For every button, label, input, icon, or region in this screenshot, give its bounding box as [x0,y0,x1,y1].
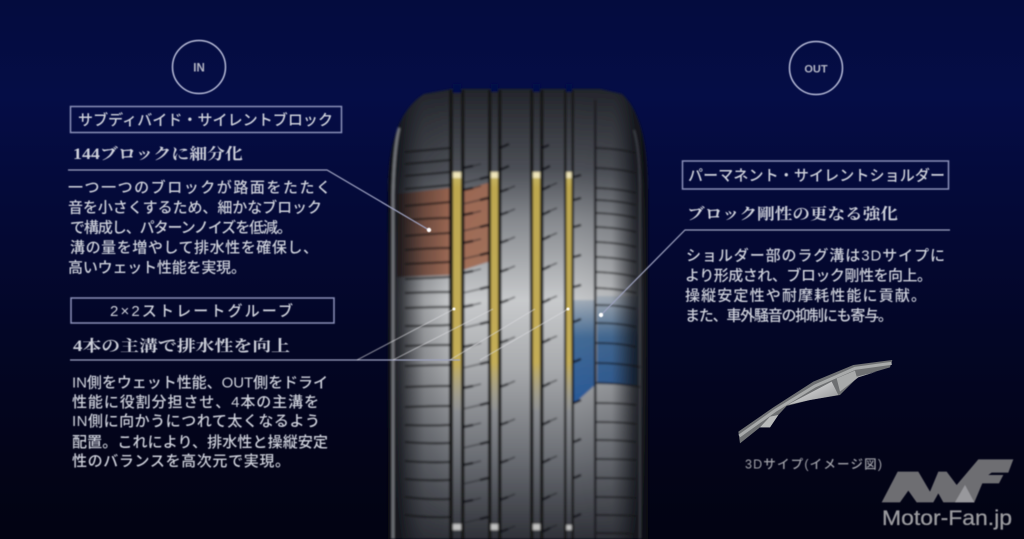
label box: サブディバイド・サイレントブロック [78,111,333,129]
rib 1 sipes [463,166,488,519]
panel: subdivide silent block [68,106,342,276]
body text: また、車外騒音の抑制にも寄与。 [685,308,893,324]
body text: 一つ一つのブロックが路面をたたく [68,178,331,196]
tire [388,84,648,539]
label box [70,106,342,132]
body text: より形成され、ブロック剛性を向上。 [685,266,932,284]
tire body [388,89,648,539]
body text: 溝の量を増やして排水性を確保し、 [70,238,318,256]
logo mark [882,459,1013,502]
shoulder groove [594,100,596,539]
heading: 4本の主溝で排水性を向上 [73,336,291,355]
red highlighted block area [397,183,488,277]
body text [685,246,945,324]
leader: silent block [68,170,431,232]
panel: permanent silent shoulder [682,161,948,324]
groove 2 [488,90,502,539]
shoulder shading [388,89,648,539]
body text: で構成し、パターンノイズを低減。 [70,218,292,236]
groove 3 [530,90,544,539]
leader: silent shoulder [599,230,950,317]
body text: 音を小さくするため、細かなブロック [68,198,322,216]
label box [682,161,948,189]
icon: 3D sipe illustration [738,360,892,443]
label box: パーマネント・サイレントショルダー [688,166,945,184]
body text: 操縦安定性や耐摩耗性能に貢献。 [685,286,926,304]
body text: 高いウェット性能を実現。 [68,260,246,276]
left shoulder sipes [405,148,450,517]
sidewall highlight lines [393,128,399,539]
logo text: Motor-Fan.jp [882,506,1012,530]
leader: straight grooves [70,308,570,360]
blue highlighted shoulder area [574,296,638,404]
IN badge [172,40,226,94]
groove 1 [449,90,464,539]
body text: IN側をウェット性能、OUT側をドライ [72,374,328,392]
rib 2 sipes [500,144,509,532]
body text: IN側に向かうにつれて太くなるよう [72,413,320,430]
body text [68,178,331,276]
label box: 2×2ストレートグルーブ [110,302,293,320]
caption: 3D sipe: 3Dサイプ(イメージ図) [745,458,882,472]
rib 3 sipes [542,145,550,532]
top tread notches [453,84,572,93]
panel: 2x2 straight groove [71,298,334,470]
heading: 144ブロックに細分化 [73,144,244,163]
heading: ブロック剛性の更なる強化 [687,204,899,223]
label box [71,298,334,323]
body text: ショルダー部のラグ溝は3Dサイプに [686,246,945,264]
leader lines [68,170,950,360]
IN badge: IN [193,62,205,74]
groove 4 [564,90,574,539]
right shoulder sipes [596,148,640,534]
OUT badge: OUT [804,64,828,76]
rib 4 sipes [574,175,581,517]
OUT badge [790,42,842,94]
body text: 性のバランスを高次元で実現。 [72,453,290,470]
logo: Motor-Fan.jp [882,459,1013,530]
body text: 性能に役割分担させ、4本の主溝を [72,393,319,411]
body text [72,374,328,470]
body text: 配置。これにより、排水性と操縦安定 [72,434,328,451]
